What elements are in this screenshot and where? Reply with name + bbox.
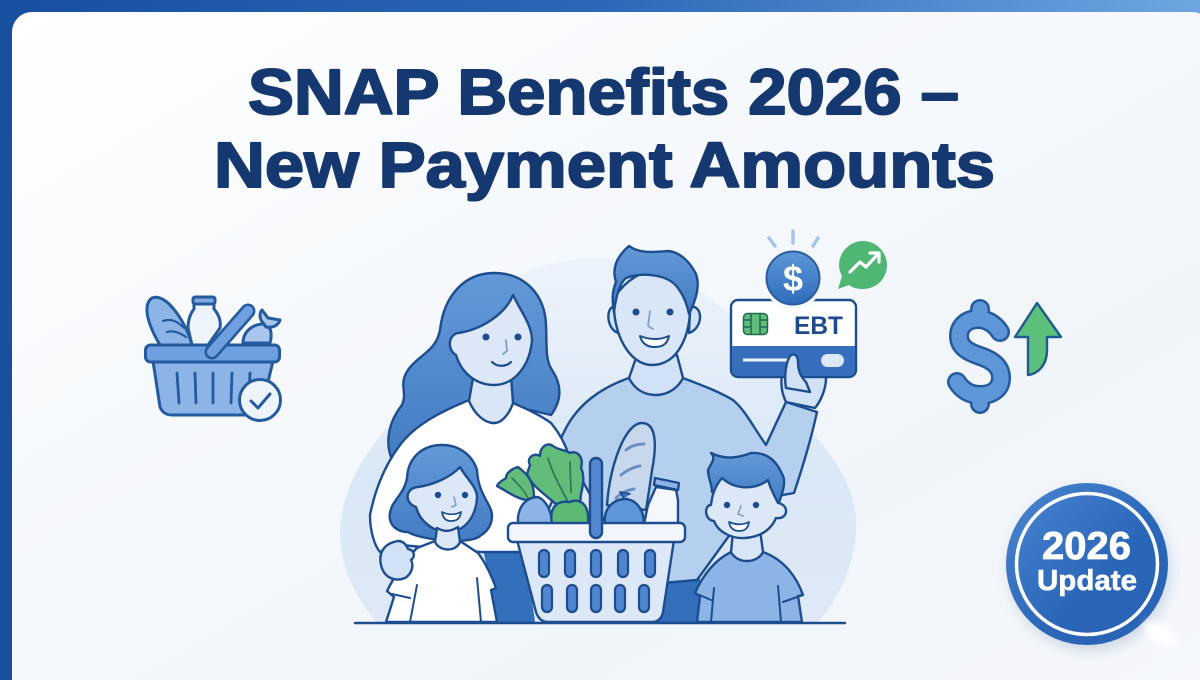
baguette [607,423,655,510]
title: New Payment Amounts [214,129,995,201]
girl neck [435,527,460,550]
basket holes [539,550,655,612]
woman face [450,295,532,385]
icon: dollar sign [957,309,1001,404]
man raised hand [781,357,826,408]
card blue stripe [732,346,855,376]
man ears [608,307,700,333]
woman neck [469,375,513,423]
sparkle rays [769,231,818,246]
man hair [613,246,698,314]
man neck [629,355,683,395]
coin with dollar sign [762,247,824,309]
green trend bubble [838,241,887,289]
shopping basket [508,458,685,622]
man pants [640,575,700,622]
card white line [743,358,788,362]
boy hair [708,453,784,505]
thumb over card [785,354,810,392]
EBT card [731,300,856,392]
badge: 2026 Update: 2026 [1042,525,1131,568]
beet leaves [497,467,534,500]
illustration: family with basket and EBT card [340,231,887,623]
card pill [821,354,844,367]
girl face [408,467,477,532]
man torso [560,378,817,585]
woman shirt [370,400,570,552]
ground line [355,622,845,624]
milk bottle [644,487,678,524]
woman hand on girl shoulder [380,541,414,579]
icon: dollar sign and up arrow [957,303,1061,404]
title [214,56,995,201]
title: SNAP Benefits 2026 – [248,56,959,128]
basket handle [590,458,602,538]
girl shirt [386,541,497,622]
man face details [632,308,674,347]
girl hair [390,445,492,541]
lettuce [527,444,583,504]
boy face details [724,502,759,531]
girl face details [435,492,468,521]
groceries in basket [497,423,679,524]
EBT label: EBT [794,312,843,340]
turnip [518,497,552,524]
coin with dollar sign: $ [783,258,803,299]
woman hair [388,273,559,460]
badge: 2026 Update [1006,483,1170,650]
background blob [340,258,856,622]
green apple [551,501,588,524]
boy neck [731,530,763,561]
badge: 2026 Update: Update [1037,565,1137,597]
icon: green up arrow [1015,303,1061,375]
boy face [706,478,786,538]
girl figure [386,445,497,622]
man head [614,269,690,365]
boy shirt [695,552,803,622]
card body [731,300,856,377]
woman pants [483,548,535,622]
blue apple [605,499,644,524]
sparkle at badge edge [1140,616,1180,652]
basket body [517,540,674,622]
card chip [744,314,768,334]
icon: grocery basket with check [146,297,280,420]
man figure [560,246,826,622]
boy figure [695,453,803,622]
basket rim [508,523,685,542]
woman figure [370,273,570,622]
woman face details [482,334,522,366]
